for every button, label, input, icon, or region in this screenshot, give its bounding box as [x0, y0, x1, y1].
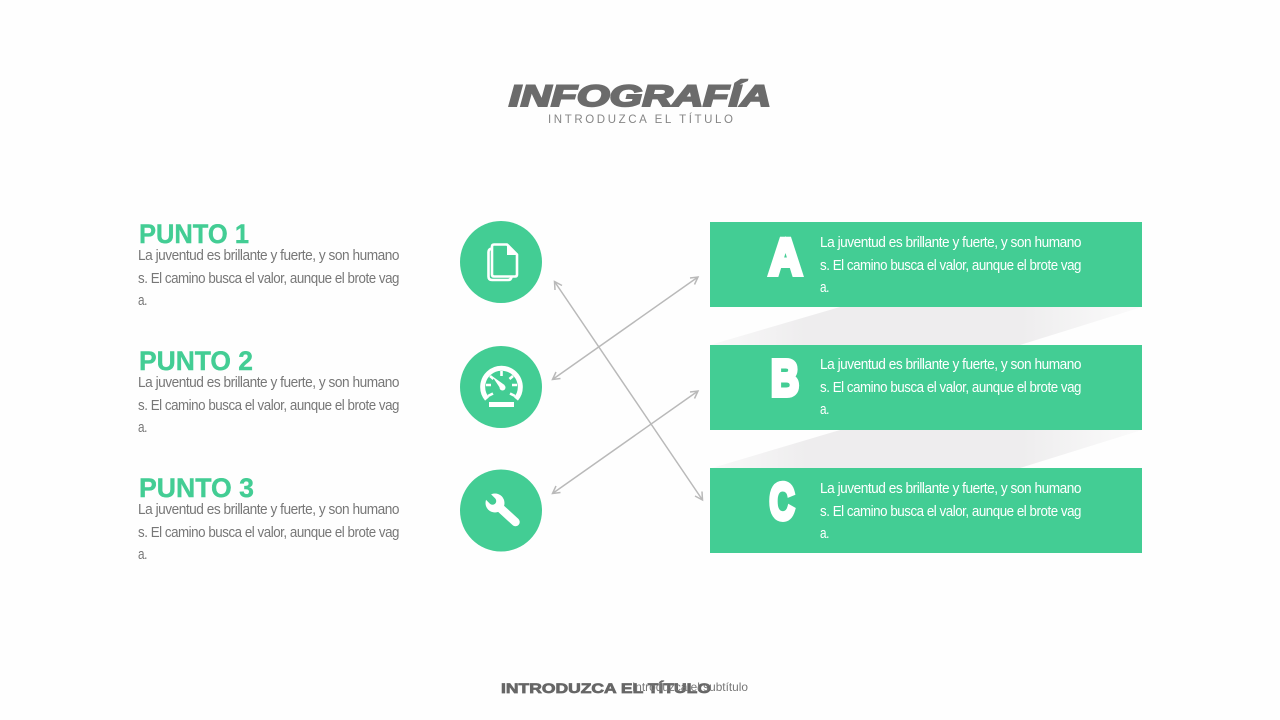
panel: A [710, 222, 1142, 307]
text block: punto 1: a. [138, 293, 147, 309]
icon: wrench [460, 470, 542, 552]
text block: punto 3: La juventud es brillante y fuerte, y son humano [138, 502, 399, 518]
text block: A: a. [820, 280, 829, 296]
heading: punto 3: PUNTO 3 [139, 473, 254, 503]
icon: documents [460, 221, 542, 303]
text block: C [820, 481, 1081, 542]
heading: punto 1: PUNTO 1 [139, 219, 249, 249]
text block: punto 3 [138, 502, 399, 563]
letter A: A [769, 228, 802, 286]
text block: A [820, 235, 1081, 296]
text block: B: La juventud es brillante y fuerte, y son humano [820, 357, 1081, 373]
panel: punto 3 [138, 473, 399, 563]
text block: A: La juventud es brillante y fuerte, y son humano [820, 235, 1081, 251]
text block: punto 2: s. El camino busca el valor, aunque el brote vag [138, 398, 399, 414]
text block: punto 1: La juventud es brillante y fuerte, y son humano [138, 248, 399, 264]
text block: B: s. El camino busca el valor, aunque el brote vag [820, 380, 1081, 396]
heading: punto 2: PUNTO 2 [139, 346, 253, 376]
text block: punto 3: s. El camino busca el valor, aunque el brote vag [138, 525, 399, 541]
text block: B: a. [820, 402, 829, 418]
panel: punto 2 [138, 346, 399, 436]
footer subtitle: Introduzca el subtítulo [632, 680, 748, 694]
text block: B [820, 357, 1081, 418]
text block: punto 2: a. [138, 420, 147, 436]
text block: C: La juventud es brillante y fuerte, y son humano [820, 481, 1081, 497]
letter B: B [771, 350, 799, 406]
text block: A: s. El camino busca el valor, aunque el brote vag [820, 258, 1081, 274]
shadow: below B [712, 430, 1142, 468]
subtitle: INTRODUZCA EL TÍTULO [548, 113, 733, 126]
text block: C: a. [820, 526, 829, 542]
panel: C [710, 468, 1142, 553]
icon: speedometer [460, 346, 542, 428]
panel: punto 1 [138, 219, 399, 309]
title: INFOGRAFÍA [509, 79, 771, 113]
shadow: below A [710, 307, 1142, 345]
footer title: INTRODUZCA EL TÍTULO [501, 681, 711, 696]
arrow: punto 1 to C [554, 282, 702, 500]
text block: punto 3: a. [138, 547, 147, 563]
letter C: C [770, 473, 794, 530]
panel: B [710, 345, 1142, 430]
text block: C: s. El camino busca el valor, aunque el brote vag [820, 504, 1081, 520]
text block: punto 2: La juventud es brillante y fuerte, y son humano [138, 375, 399, 391]
text block: punto 2 [138, 375, 399, 436]
arrow: punto 3 to B [552, 391, 698, 494]
text block: punto 1 [138, 248, 399, 309]
text block: punto 1: s. El camino busca el valor, aunque el brote vag [138, 271, 399, 287]
arrow: punto 2 to A [552, 277, 698, 380]
